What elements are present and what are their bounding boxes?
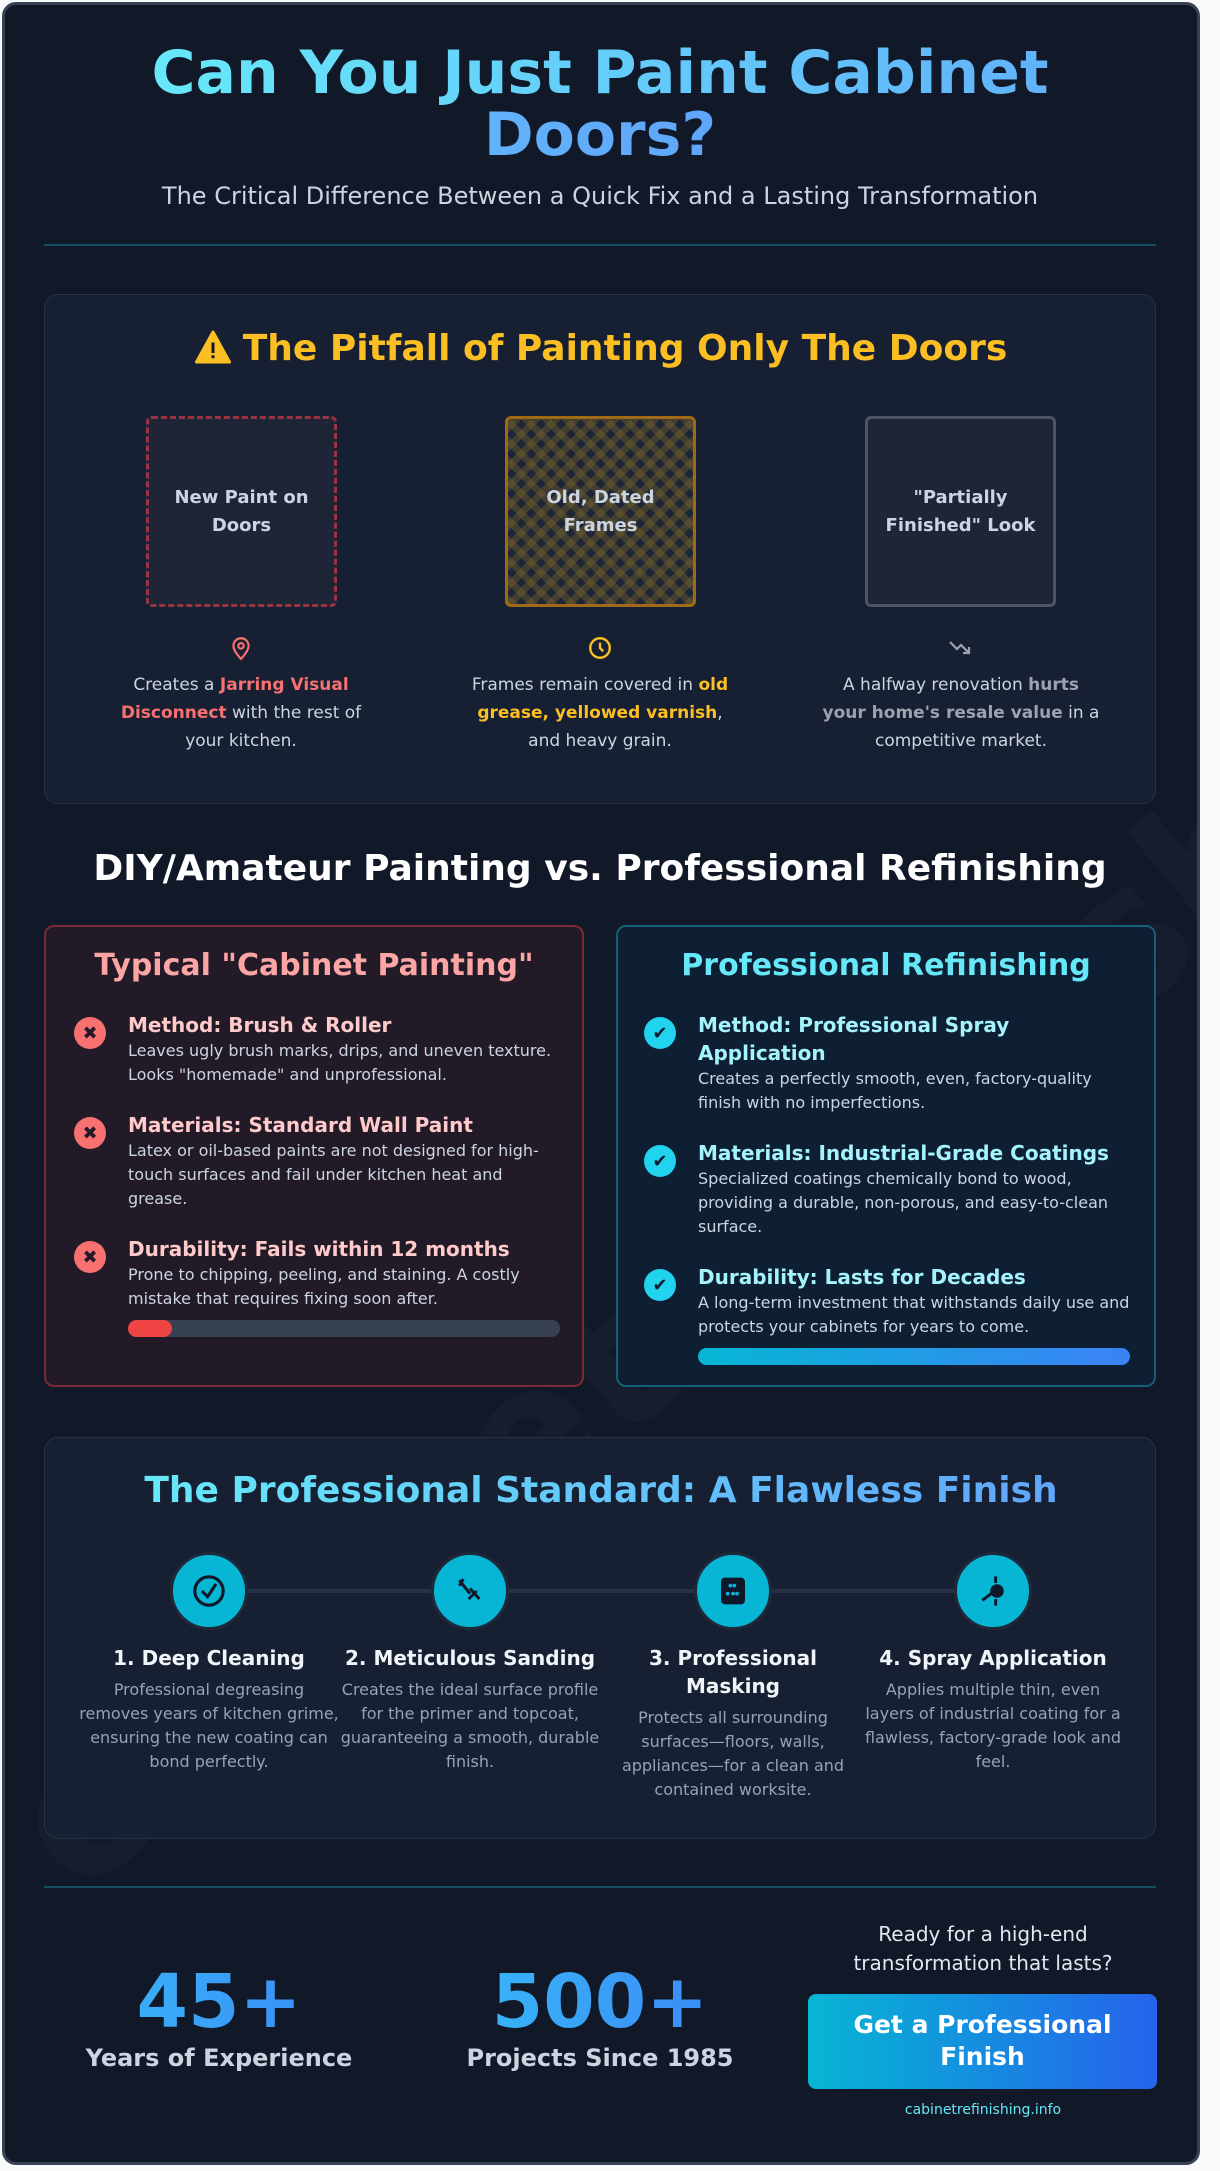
panel: professional: ✔ [652, 1150, 668, 1172]
title: Doors? [484, 100, 716, 170]
bar: high durability [698, 1348, 1130, 1365]
DIY title: Typical "Cabinet Painting" [94, 948, 534, 983]
text: disconnect: Creates a Jarring Visual Disconnect with the rest of your kitchen. [121, 675, 361, 751]
CTA button: Finish [940, 2042, 1025, 2071]
panel: pitfall [44, 294, 1156, 804]
item: method: Creates a perfectly smooth, even, factory-quality finish with no imperfections. [698, 1069, 1092, 1112]
stat: projects: 500+ [492, 1959, 708, 2045]
text: resale: A halfway renovation hurts your home's resale value in a competitive market. [823, 675, 1099, 751]
heading: comparison: DIY/Amateur Painting vs. Professional Refinishing [93, 848, 1107, 889]
CTA button: Get a Professional [853, 2010, 1112, 2039]
CTA text: Ready for a high-end [878, 1922, 1088, 1946]
step 1: Professional degreasing removes years of kitchen grime, ensuring the new coating can bond perfectly. [79, 1680, 339, 1771]
box: new paint: New Paint on [174, 486, 309, 508]
item: materials: Materials: Standard Wall Paint [128, 1113, 473, 1137]
icon: check [170, 1552, 248, 1630]
step 4: Applies multiple thin, even layers of industrial coating for a flawless, factory-grade look and feel. [865, 1680, 1121, 1771]
item: materials [644, 1141, 1109, 1236]
panel: professional: ✔ [652, 1022, 668, 1044]
panel: DIY: ✖ [82, 1246, 98, 1268]
box: old frames [505, 416, 696, 607]
CTA text: transformation that lasts? [853, 1951, 1113, 1975]
step 1: 1. Deep Cleaning [113, 1646, 305, 1670]
box: old frames: Old, Dated [546, 486, 655, 508]
panel: DIY: ✖ [82, 1022, 98, 1044]
item: durability: Durability: Fails within 12 months [128, 1237, 510, 1261]
item: durability: Durability: Lasts for Decades [698, 1265, 1026, 1289]
step 3: Protects all surrounding surfaces—floors, walls, appliances—for a clean and contained worksite. [622, 1708, 844, 1799]
pitfall heading: The Pitfall of Painting Only The Doors [243, 328, 1007, 369]
footer link: cabinetrefinishing.info [905, 2102, 1061, 2118]
item: durability [74, 1237, 520, 1308]
item: method [644, 1013, 1092, 1112]
item: durability: A long-term investment that withstands daily use and protects your cabinets for years to come. [698, 1293, 1129, 1336]
step 2: 2. Meticulous Sanding [345, 1646, 595, 1670]
panel: DIY: ✖ [82, 1122, 98, 1144]
icon: trend down [949, 641, 970, 654]
step 2: Creates the ideal surface profile for the primer and topcoat, guaranteeing a smooth, durable finish. [341, 1680, 599, 1771]
title [151, 38, 1049, 170]
step 4: 4. Spray Application [879, 1646, 1107, 1670]
item: method: Method: Professional Spray Application [698, 1013, 1009, 1065]
icon: sanding [431, 1552, 509, 1630]
item: materials: Materials: Industrial-Grade Coatings [698, 1141, 1109, 1165]
bar: low durability [128, 1320, 560, 1337]
box: partially finished: "Partially [913, 486, 1008, 508]
subtitle: The Critical Difference Between a Quick Fix and a Lasting Transformation [162, 182, 1038, 210]
panel: professional [616, 925, 1156, 1387]
stat: projects: Projects Since 1985 [466, 2044, 734, 2072]
panel: DIY [44, 925, 584, 1387]
pro title: Professional Refinishing [681, 948, 1091, 983]
box: old frames: Frames [564, 514, 637, 536]
icon: clock [589, 637, 611, 659]
box: partially finished [865, 416, 1056, 607]
item: materials: Latex or oil-based paints are not designed for high-touch surfaces and fail under kitchen heat and grease. [128, 1141, 539, 1208]
item: durability [644, 1265, 1129, 1336]
CTA button [808, 1994, 1157, 2089]
step 3 [622, 1646, 844, 1799]
box: partially finished: Finished" Look [886, 514, 1035, 536]
item: materials [74, 1113, 539, 1208]
item: method [74, 1013, 551, 1084]
icon: pin [232, 637, 250, 660]
stat: years: 45+ [136, 1959, 301, 2045]
panel: professional: ✔ [652, 1274, 668, 1296]
stat: projects [466, 1959, 734, 2072]
icon: spray [954, 1552, 1032, 1630]
stat: years: Years of Experience [86, 2044, 352, 2072]
box: new paint [146, 416, 337, 607]
panel: professional standard [44, 1437, 1156, 1839]
item: method: Method: Brush & Roller [128, 1013, 391, 1037]
icon: masking [694, 1552, 772, 1630]
title: Can You Just Paint Cabinet [151, 38, 1049, 108]
text: frames: Frames remain covered in old grease, yellowed varnish, and heavy grain. [472, 675, 728, 751]
item: method: Leaves ugly brush marks, drips, and uneven texture. Looks "homemade" and unprofessional. [128, 1041, 551, 1084]
item: durability: Prone to chipping, peeling, and staining. A costly mistake that requires fixing soon after. [128, 1265, 520, 1308]
box: new paint: Doors [212, 514, 271, 536]
item: materials: Specialized coatings chemically bond to wood, providing a durable, non-porous, and easy-to-clean surface. [698, 1169, 1108, 1236]
standard heading: The Professional Standard: A Flawless Finish [144, 1470, 1058, 1511]
stat: years [86, 1959, 352, 2072]
CTA text [853, 1922, 1113, 1975]
step 3: 3. Professional Masking [649, 1646, 817, 1698]
